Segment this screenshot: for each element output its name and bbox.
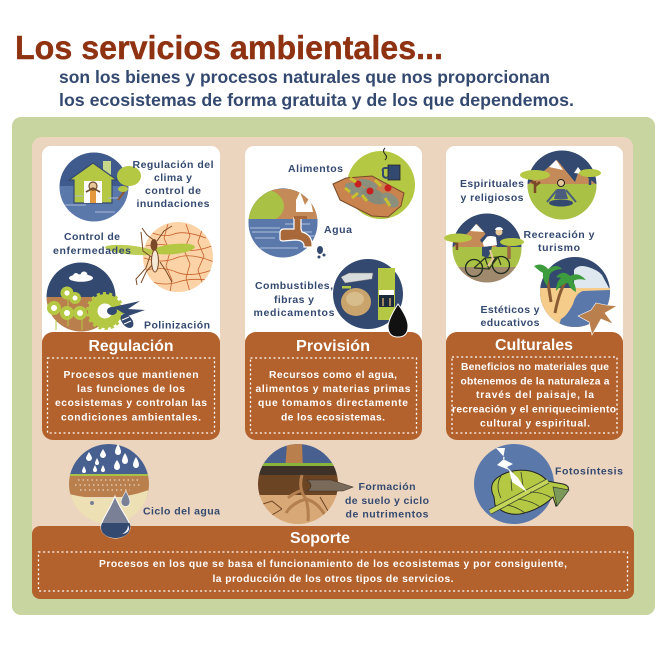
box: provisión [245,332,422,440]
label: Recreación y [524,229,595,241]
description: las funciones de los [77,384,185,395]
label: educativos [480,317,540,329]
label: Alimentos [288,163,343,175]
panel: outer green background [12,117,655,615]
description: la producción de los otros tipos de servicios. [212,574,454,585]
description: través del paisaje, la [476,390,594,401]
description [452,362,616,430]
title: Los servicios ambientales... [15,29,443,66]
icon: soil [258,444,353,525]
icon: starfish [578,303,617,335]
description: de los ecosistemas. [281,412,385,424]
heading: Provisión [296,338,370,355]
description [55,370,207,424]
heading: Soporte [290,530,350,547]
panel: soporte icons [69,444,623,538]
label: Agua [324,224,352,236]
label: Polinización [144,320,210,332]
description [256,370,411,424]
label: Estéticos y [480,304,540,316]
description: cultural y espiritual. [480,418,590,430]
description: que tomamos directamente [258,398,408,409]
label: Control de [64,231,120,243]
icons and labels: provisión [240,148,415,337]
heading: Regulación [88,338,174,355]
label: medicamentos [254,307,335,319]
icons and labels: regulación [46,152,214,333]
description: Beneficios no materiales que [461,362,609,373]
label: Fotosíntesis [555,466,623,478]
icon: house in flood [59,152,129,222]
label: clima y [154,172,192,184]
icon: cyclist [444,213,524,283]
panel: inner peach background [32,137,633,599]
icon: meditation [520,150,601,220]
icons and labels: culturales [444,150,617,335]
description [99,559,567,585]
icon: fuel, fibres and medicine [333,259,408,337]
icon: mosquito on skin [105,222,214,292]
subtitle: son los bienes y procesos naturales que nos proporcionan [59,67,550,87]
description: alimentos y materias primas [256,384,411,395]
label: control de [145,185,201,197]
icon: water tap [248,188,326,258]
box: soporte [32,526,634,599]
label: Regulación del [132,159,214,171]
panel: provisión card [245,146,422,346]
label: Ciclo del agua [143,506,220,518]
label: inundaciones [136,198,210,210]
description: obtenemos de la naturaleza a [460,376,610,388]
label: fibras y [274,294,314,306]
icon: photosynthesis leaf [474,444,569,524]
icon: beach [534,257,611,328]
description: Recursos como el agua, [269,370,397,381]
icon: tree [117,166,141,200]
label: Espirituales [460,178,524,190]
label: Formación [358,481,416,493]
box: culturales [446,332,623,440]
label: de suelo y ciclo [345,495,429,507]
panel: regulación card [42,146,220,346]
subtitle: los ecosistemas de forma gratuita y de los que dependemos. [59,90,574,110]
description: ecosistemas y controlan las [55,398,207,409]
panel: culturales card [446,146,623,346]
description: recreación y el enriquecimiento [452,404,616,416]
icon: water cycle [69,444,149,538]
subtitle [59,67,574,110]
box: regulación [42,332,220,440]
label: Combustibles, [255,280,333,292]
description: Procesos en los que se basa el funcionamiento de los ecosistemas y por consiguiente, [99,559,567,570]
description: Procesos que mantienen [64,370,198,381]
label: turismo [538,242,580,254]
icon: pollination [46,262,145,333]
label: y religiosos [460,192,524,204]
label: enfermedades [53,245,131,257]
heading: Culturales [495,337,573,354]
icon: food [333,148,415,219]
label: de nutrimentos [346,508,429,520]
description: condiciones ambientales. [61,412,201,424]
